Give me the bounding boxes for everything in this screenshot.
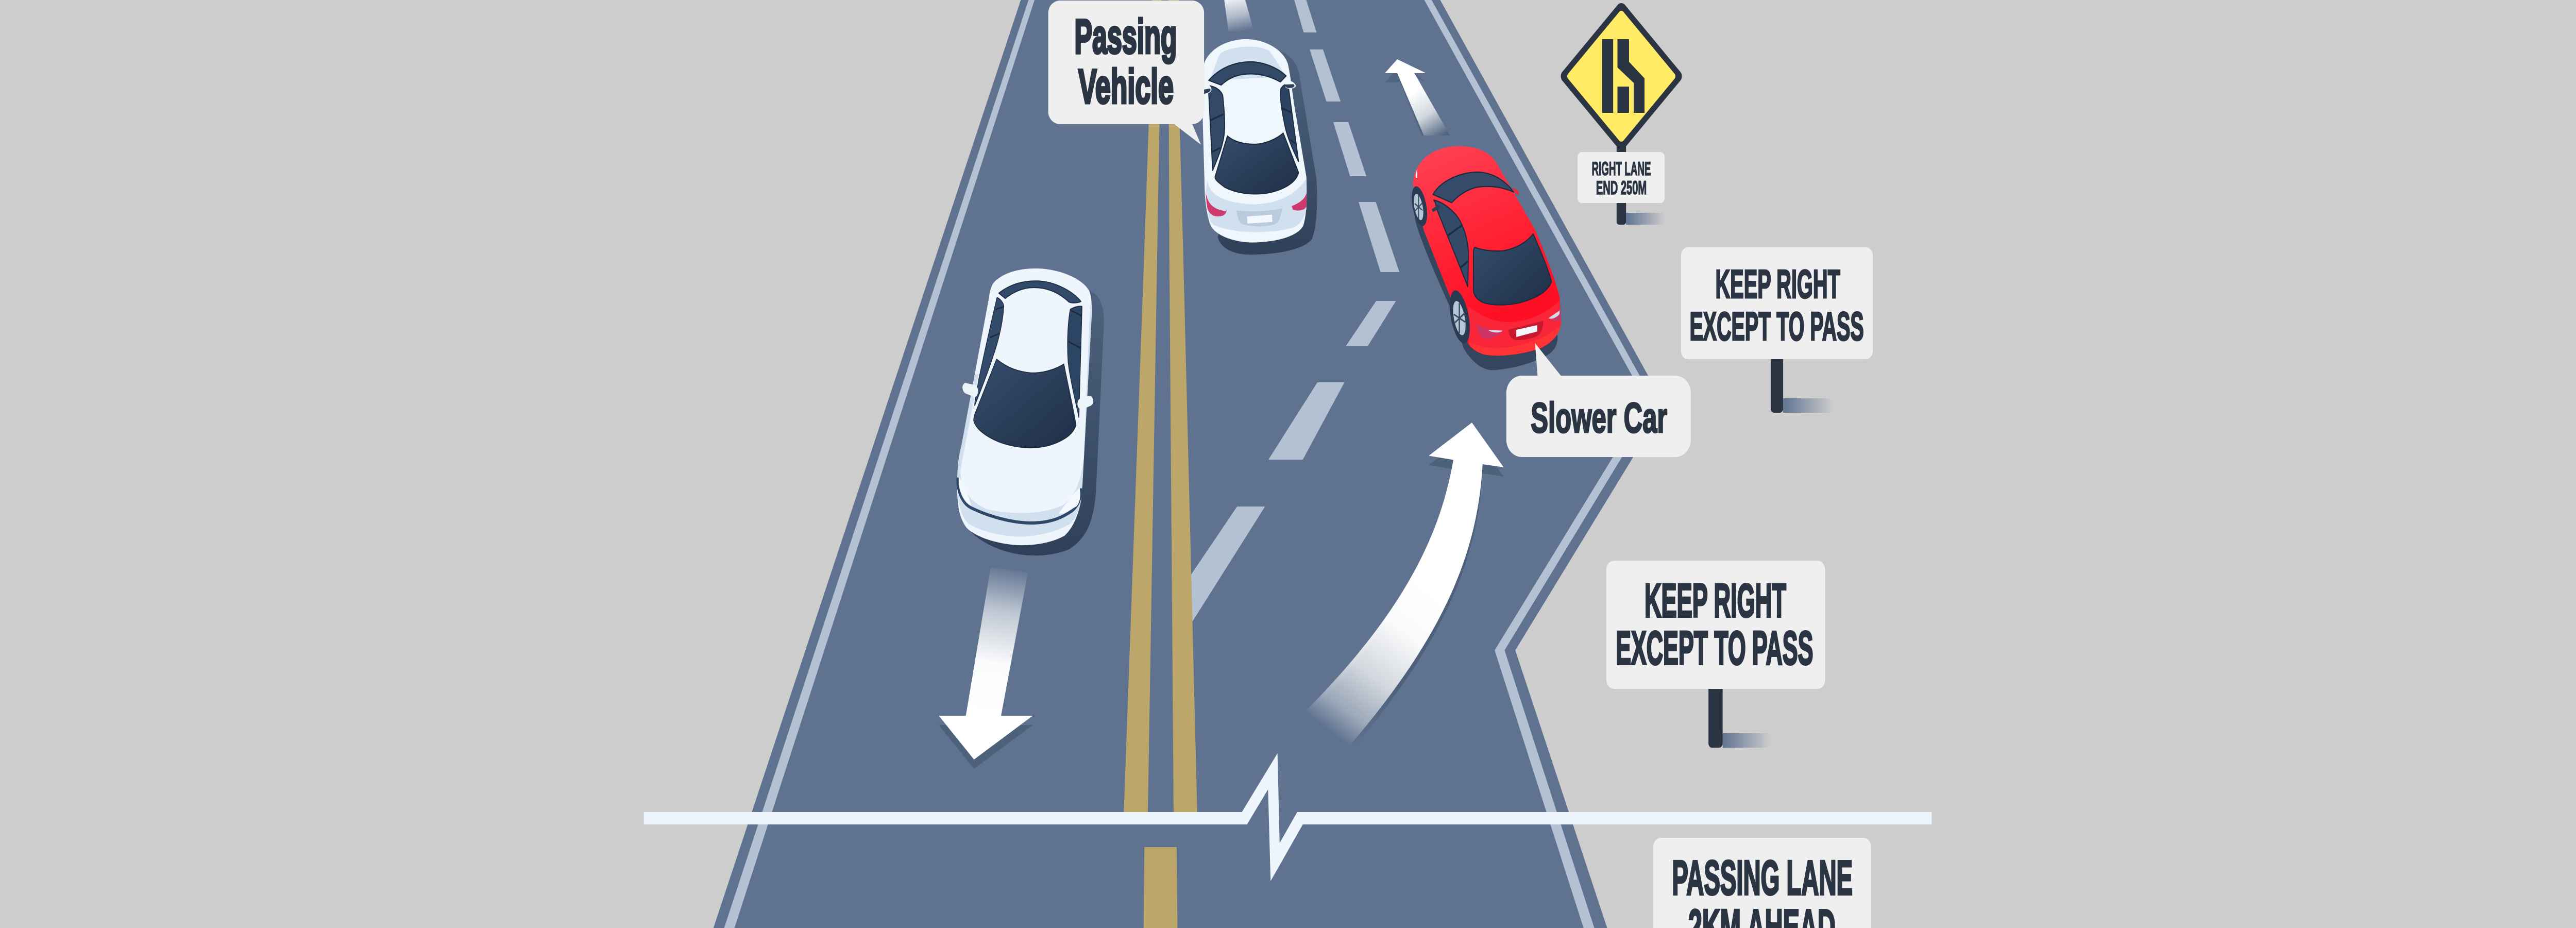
sign board [1606,561,1825,689]
post shadow [1723,733,1770,748]
car shadow [1217,50,1317,255]
car shadow [1414,208,1557,370]
post shadow [1626,213,1665,225]
white break line [644,753,1931,881]
rear panel [1468,300,1561,350]
car body [1413,146,1561,356]
car body [957,268,1092,545]
right road edge line [1425,0,1655,928]
sign board [1653,838,1871,928]
left mirror [962,383,978,397]
rear window [999,281,1081,303]
car: slower red car [1409,146,1561,370]
road sign: keep right lower [1606,561,1825,748]
sign board [1681,247,1873,359]
diamond face [1570,14,1672,138]
callout: slower car [1506,343,1691,457]
arrow body [1385,59,1450,136]
headlight [1416,169,1417,178]
right tail light [1292,192,1307,211]
car: oncoming white car [957,268,1104,555]
callout text: Vehicle [1078,60,1174,114]
rear wheel [1446,288,1473,346]
post [1617,144,1626,225]
sign plate text: RIGHT LANE [1591,158,1651,180]
sign plate text: END 250M [1596,177,1647,199]
arrow: behind passing vehicle [1224,0,1254,31]
left tail light [1206,192,1227,216]
sign text: KEEP RIGHT [1715,262,1840,307]
double yellow centre line [1124,0,1197,928]
lane merge symbol [1602,39,1645,113]
arrow: curved passing path [1304,423,1504,749]
road sign: passing lane ahead [1653,838,1871,928]
post [1771,356,1783,413]
front wheel [1409,184,1430,228]
road surface [714,0,1665,928]
front hood panel [1209,46,1285,81]
right mirror [1513,188,1519,195]
callout text: Slower Car [1531,394,1667,442]
sign text [1672,850,1853,928]
license plate [1516,325,1537,337]
diamond sign [1566,9,1676,143]
sign text [1616,573,1813,674]
arrow shadow [939,725,1033,769]
left side window [975,297,1004,406]
license plate [1247,215,1273,224]
car body [1202,39,1307,243]
sign text: PASSING LANE [1672,850,1853,905]
right mirror [1077,396,1093,410]
front windshield [1433,172,1514,203]
callout: passing vehicle [1048,1,1204,145]
sign text: EXCEPT TO PASS [1616,621,1813,674]
right mirror [1285,81,1296,89]
callout text: Passing [1074,10,1177,64]
arrow: ahead of slower car [1385,59,1450,136]
bumper stripe [958,478,1081,523]
right tail light strip [1549,311,1560,318]
right side window [1280,84,1298,161]
arrow body [1304,423,1504,746]
bumper lip [1469,325,1561,356]
rear bumper panel [1206,179,1307,232]
rear windscreen [1473,234,1551,305]
road [714,0,1665,928]
left mirror dark [1204,89,1211,94]
road sign: right lane ends [1566,9,1676,225]
lane dashes [1191,0,1399,621]
side and bumper shading [958,303,1092,537]
plate recess [1508,321,1543,340]
car: passing vehicle [1202,39,1317,255]
callout text [1074,10,1177,114]
rear window [1209,62,1286,85]
left window pillars [990,307,1003,338]
right mirror dark [1285,84,1294,88]
left headlight [959,478,971,505]
callout bubble [1506,343,1691,457]
side window [1434,200,1468,286]
sign plate [1578,152,1665,203]
left window pillars [1211,114,1224,152]
window pillars [1448,225,1468,268]
sign text: KEEP RIGHT [1645,573,1786,627]
windshield [974,359,1076,448]
post shadow [1783,398,1833,413]
right window pillars [1282,108,1296,144]
right window pillars [1068,311,1081,348]
car shadow [972,289,1104,555]
right headlight [1059,488,1080,514]
arrow shadow [1385,69,1450,136]
left tail light strip [1488,330,1502,332]
left mirror [1204,84,1212,94]
right tail light [1548,308,1561,321]
left road edge line [724,0,1035,928]
back windscreen [1215,133,1298,194]
left mirror [1432,205,1440,212]
arrow shadow [1308,432,1504,749]
arrow body [939,567,1033,760]
left tail light [1477,324,1502,339]
left side window [1208,86,1225,171]
plate recess [1236,208,1282,226]
post [1708,685,1723,748]
callout bubble [1048,1,1204,145]
sign text [1689,262,1864,349]
arrow: oncoming car direction [939,567,1033,769]
sign text: EXCEPT TO PASS [1689,304,1864,349]
sign plate text [1591,158,1651,199]
road sign: keep right upper [1681,247,1873,413]
right side window [1067,306,1082,417]
